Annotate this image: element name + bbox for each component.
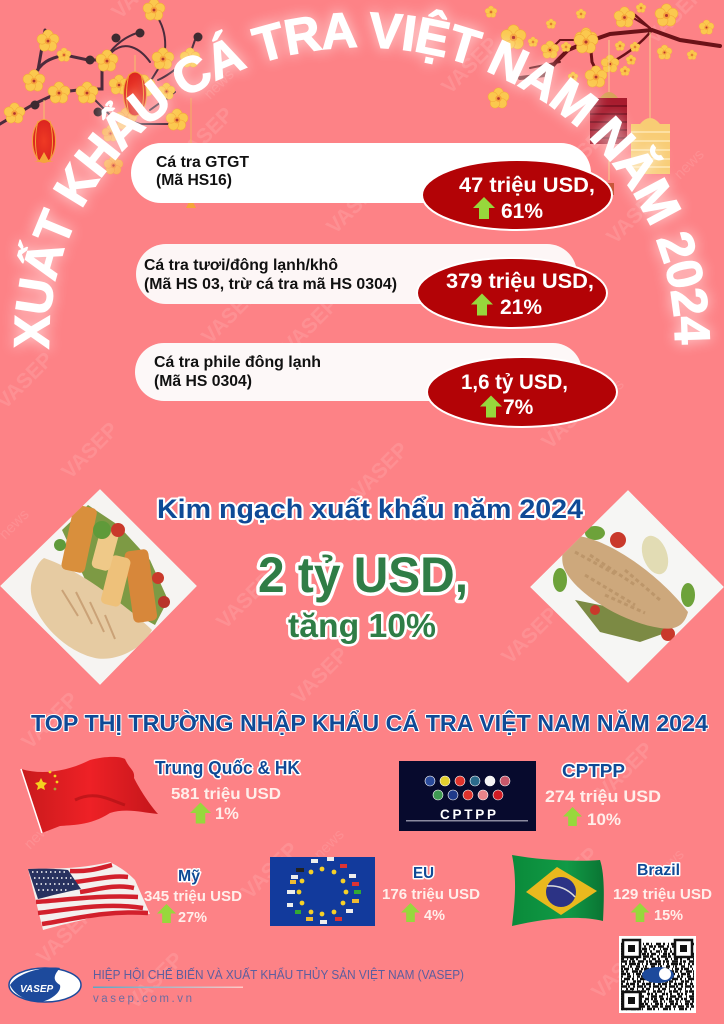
market: USA <box>144 868 242 926</box>
watermarks: news <box>201 66 238 103</box>
row: Cá tra phile đông lạnh: Cá tra phile đông lạnh <box>154 354 321 371</box>
market: China and HK <box>155 758 300 824</box>
watermarks: VASEP <box>237 838 303 904</box>
market: USA: 345 triệu USD <box>144 889 242 905</box>
watermarks: news <box>651 846 688 883</box>
right lanterns <box>590 32 670 195</box>
market: Brazil: Brazil <box>637 862 680 879</box>
row: Cá tra GTGT: Cá tra GTGT <box>156 154 250 171</box>
market: CPTPP: 10% <box>587 810 621 829</box>
watermarks: VASEP <box>122 948 188 1014</box>
QR code <box>619 936 696 1013</box>
footer rule <box>93 986 243 988</box>
market: China and HK: Trung Quốc & HK <box>155 758 300 778</box>
flag: Brazil <box>512 855 604 926</box>
value oval: 379 triệu USD, <box>446 270 594 293</box>
row: Cá tra GTGT <box>131 143 612 230</box>
market: Brazil: 129 triệu USD <box>613 887 712 903</box>
market: China and HK: 581 triệu USD <box>171 786 281 803</box>
footer organisation name: HIỆP HỘI CHẾ BIẾN VÀ XUẤT KHẨU THỦY SẢN VIỆT NAM (VASEP) <box>93 967 464 982</box>
market: USA: Mỹ <box>178 868 200 885</box>
watermarks: VASEP <box>537 388 603 454</box>
watermarks: news <box>21 816 58 853</box>
value oval: 7% <box>503 396 534 419</box>
row: Cá tra GTGT: (Mã HS16) <box>156 172 232 189</box>
footer website: vasep.com.vn <box>93 993 192 1005</box>
value oval <box>417 258 607 328</box>
headline figure: 2 tỷ USD, <box>258 547 468 603</box>
footer logo <box>9 968 81 1002</box>
row: Cá tra tươi/đông lạnh/khô: (Mã HS 03, trừ cá tra mã HS 0304) <box>144 276 397 293</box>
watermarks: VASEP <box>57 418 123 484</box>
market: EU: 176 triệu USD <box>382 887 480 903</box>
flag: EU <box>270 857 375 926</box>
watermarks: VASEP <box>497 603 563 669</box>
right blossom branch <box>485 3 720 108</box>
logo: CPTPP: CPTPP <box>440 807 496 822</box>
footer logo: VASEP <box>20 984 53 995</box>
watermarks: VASEP <box>287 643 353 709</box>
photo: grilled fillet <box>530 490 724 683</box>
row: Cá tra phile đông lạnh <box>135 343 617 427</box>
title: XUẤT KHẨU CÁ TRA VIỆT NAM NĂM 2024 <box>8 4 716 352</box>
market: EU <box>382 865 480 924</box>
heading: top markets: TOP THỊ TRƯỜNG NHẬP KHẨU CÁ TRA VIỆT NAM NĂM 2024 <box>31 709 708 736</box>
watermarks: VASEP <box>437 33 503 99</box>
market: CPTPP: 274 triệu USD <box>545 787 661 806</box>
row: Cá tra tươi/đông lạnh/khô <box>136 244 607 328</box>
left blossom branch <box>0 0 202 174</box>
photo: fish wrap <box>0 489 197 685</box>
market: EU: 4% <box>424 908 445 924</box>
watermarks: VASEP <box>552 118 618 184</box>
value oval: 21% <box>500 296 542 319</box>
value oval: 47 triệu USD, <box>459 174 595 197</box>
value oval <box>427 357 617 427</box>
watermarks: VASEP <box>197 283 263 349</box>
watermarks: VASEP <box>277 293 343 359</box>
heading: export value: Kim ngạch xuất khẩu năm 2024 <box>157 494 583 524</box>
market: CPTPP: CPTPP <box>562 761 625 781</box>
market: Brazil <box>613 862 712 924</box>
watermarks: news <box>591 376 628 413</box>
growth figure: tăng 10% <box>288 607 436 644</box>
logo: CPTPP <box>399 761 536 831</box>
value oval: 61% <box>501 200 543 223</box>
flag: China <box>21 757 158 833</box>
watermarks: VASEP <box>602 183 668 249</box>
watermarks: news <box>671 146 708 183</box>
row: Cá tra tươi/đông lạnh/khô: Cá tra tươi/đông lạnh/khô <box>144 257 338 274</box>
watermarks: VASEP <box>347 438 413 504</box>
watermarks: VASEP <box>537 843 603 909</box>
value oval: 1,6 tỷ USD, <box>461 371 568 394</box>
value oval <box>422 160 612 230</box>
row: Cá tra phile đông lạnh: (Mã HS 0304) <box>154 373 252 390</box>
market: Brazil: 15% <box>654 908 683 924</box>
market: EU: EU <box>413 865 434 882</box>
watermarks: VASEP <box>592 738 658 804</box>
watermarks: VASEP <box>212 568 278 634</box>
watermarks: VASEP <box>17 688 83 754</box>
watermarks: VASEP <box>587 938 653 1004</box>
market: China and HK: 1% <box>215 805 239 823</box>
watermarks: VASEP <box>32 903 98 969</box>
watermarks: news <box>311 826 348 863</box>
market: USA: 27% <box>178 910 207 926</box>
watermarks: VASEP <box>322 173 388 239</box>
flag: USA <box>28 862 150 930</box>
left lanterns <box>32 55 196 208</box>
watermarks: VASEP <box>172 103 238 169</box>
watermarks: VASEP <box>507 248 573 314</box>
market: CPTPP <box>545 761 661 829</box>
